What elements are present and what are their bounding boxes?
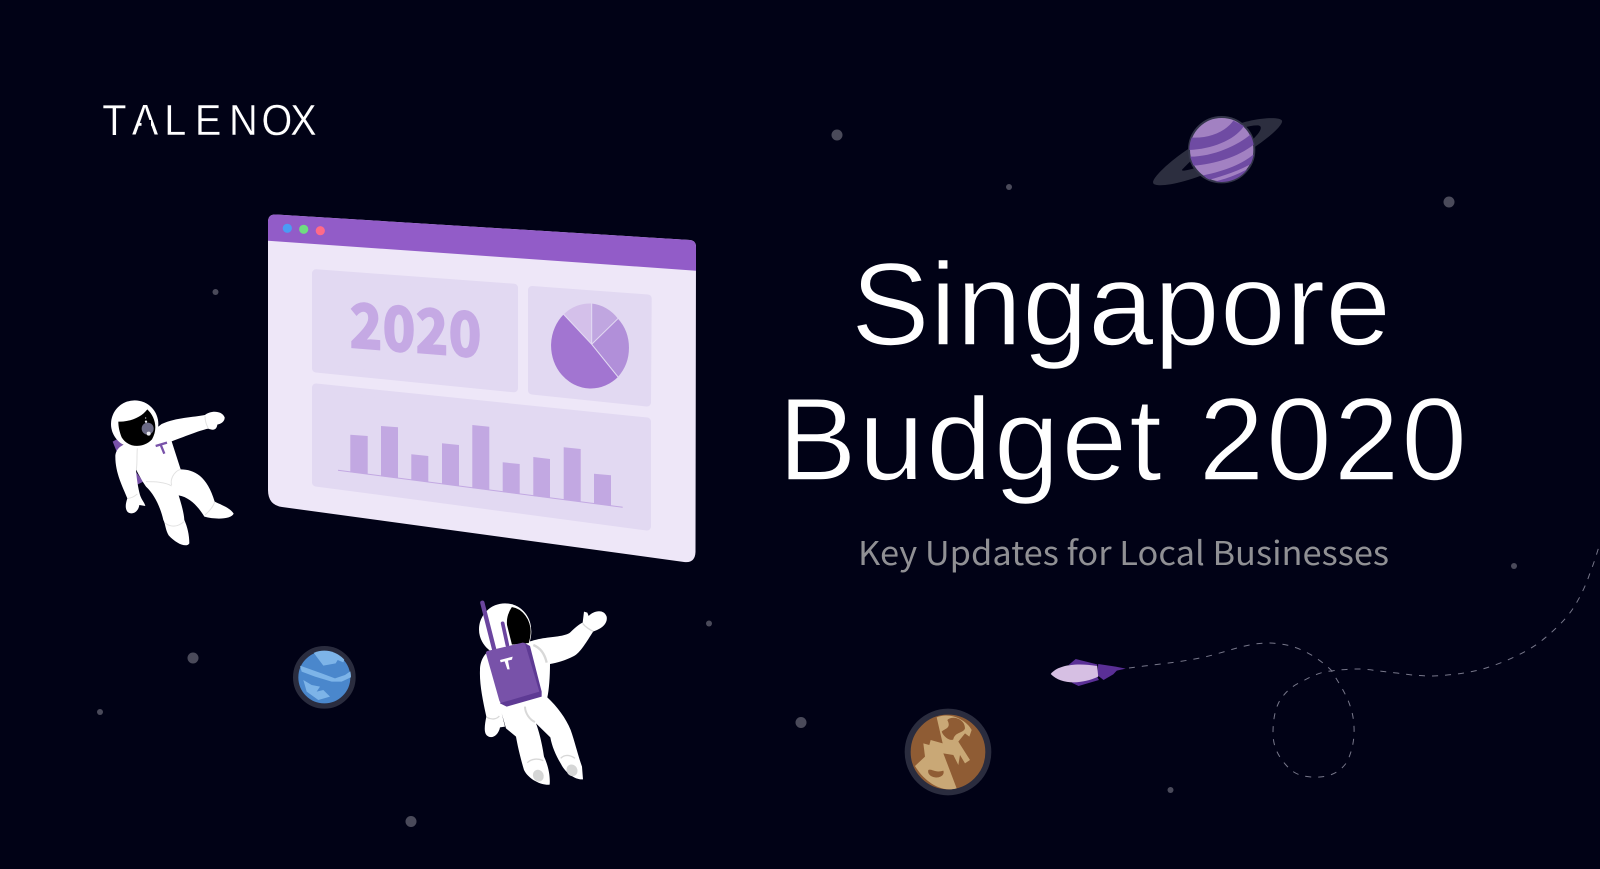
window title bar xyxy=(268,214,696,271)
chest T badge xyxy=(156,443,167,454)
planet: ringed purple xyxy=(1153,117,1282,185)
subtitle: Key Updates for Local Businesses xyxy=(858,527,1389,575)
panel: bar chart card xyxy=(316,388,647,526)
planet bands xyxy=(1188,121,1256,183)
browser window dashboard xyxy=(268,214,696,562)
panel: 2020 card: 2020 xyxy=(350,276,482,376)
antennas xyxy=(482,603,507,650)
background stars xyxy=(97,130,1517,827)
window body xyxy=(268,214,696,562)
astronaut: bottom, with backpack xyxy=(479,603,607,785)
astronaut: left, facing window xyxy=(111,400,234,545)
suit xyxy=(480,611,607,785)
helmet xyxy=(479,603,531,655)
backpack xyxy=(486,643,542,707)
pie chart xyxy=(551,303,629,389)
planet: brown xyxy=(908,712,988,792)
suit shading xyxy=(487,623,593,763)
planet disc xyxy=(1189,117,1254,182)
suit fold lines xyxy=(128,416,215,526)
suit xyxy=(115,412,234,545)
helmet xyxy=(111,400,158,448)
logo: Talenox: TALENOX xyxy=(102,95,317,144)
window control dots xyxy=(283,224,325,235)
title xyxy=(778,239,1467,506)
infographic canvas xyxy=(97,104,1599,827)
ring xyxy=(1153,118,1282,185)
rocket xyxy=(1051,659,1126,686)
boot soles xyxy=(531,762,580,783)
rocket flight path xyxy=(1129,543,1600,777)
planet: blue xyxy=(296,649,353,706)
panel: pie chart card xyxy=(532,290,648,402)
backpack edges xyxy=(113,439,143,485)
title: Singapore xyxy=(851,239,1391,371)
title: Budget 2020 xyxy=(778,374,1467,506)
panel: 2020 card xyxy=(316,273,514,388)
bar chart xyxy=(338,425,623,507)
